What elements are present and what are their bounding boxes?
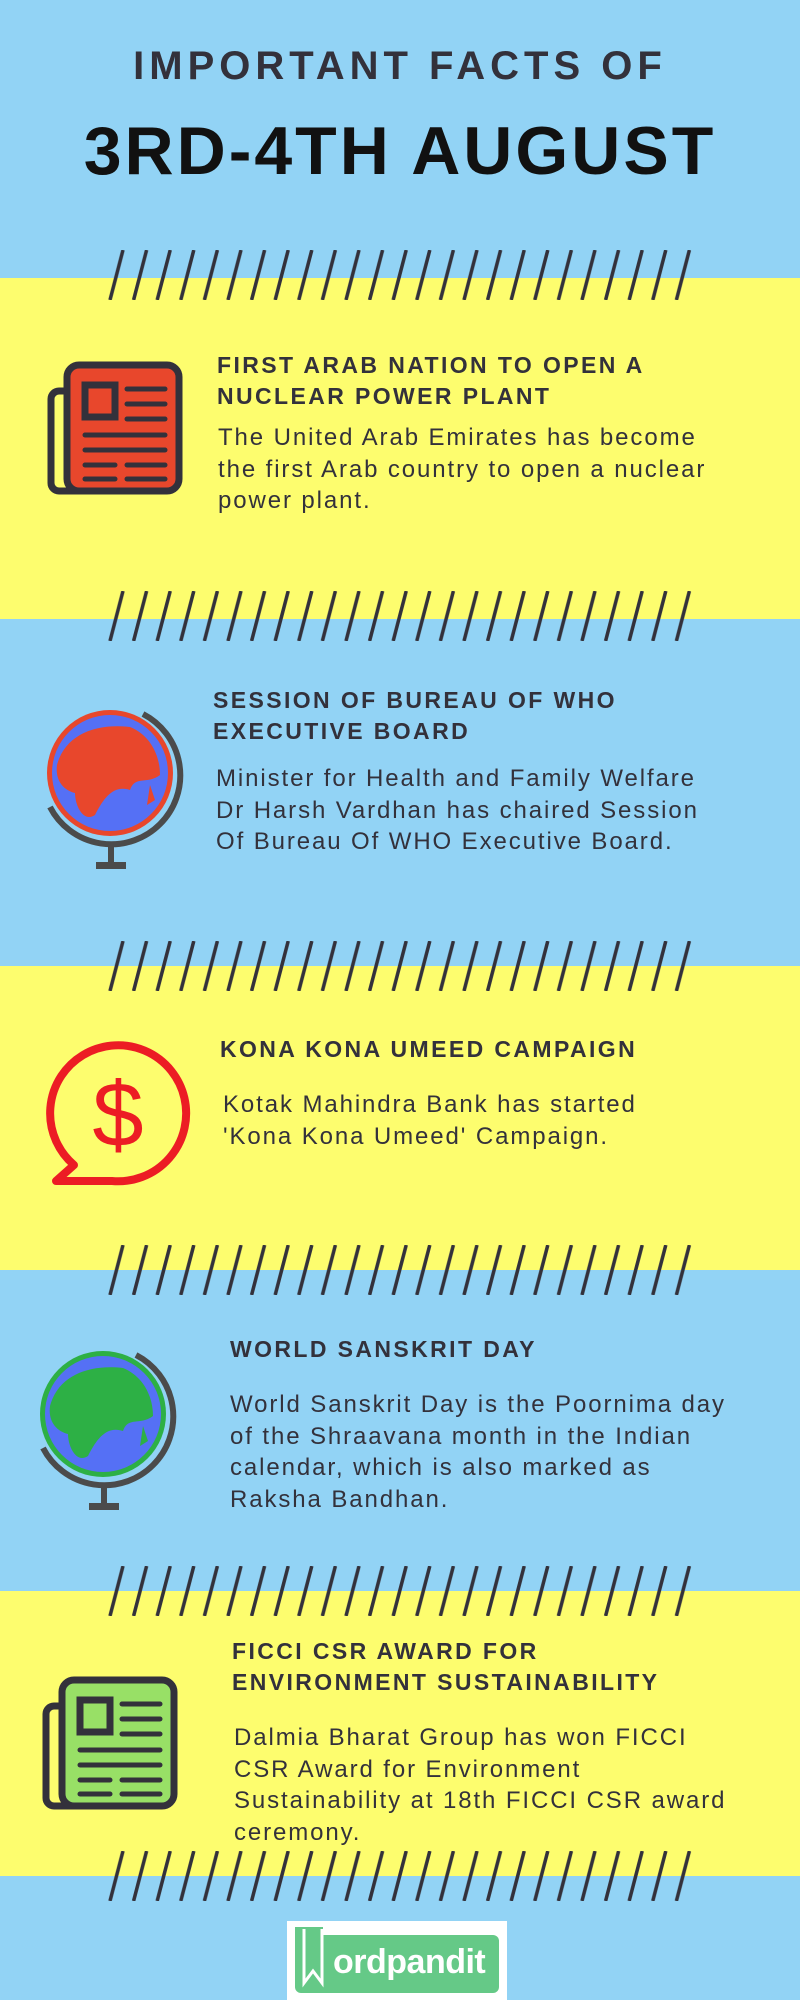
body text [223, 1091, 637, 1150]
icon: green newspaper [42, 1676, 178, 1810]
band: yellow 3 [0, 966, 800, 1270]
panel: fact 2 [47, 687, 699, 869]
icon: red newspaper [48, 362, 182, 494]
body text [216, 765, 699, 855]
body text: Raksha Bandhan. [230, 1486, 449, 1512]
band: yellow 1 [0, 278, 800, 619]
body text: power plant. [218, 487, 372, 514]
title line 2: 3RD-4TH AUGUST [84, 113, 716, 189]
body text: World Sanskrit Day is the Poornima day [230, 1391, 726, 1418]
heading: FICCI CSR AWARD FOR [232, 1638, 539, 1664]
band: blue 2 [0, 619, 800, 966]
body text: ceremony. [234, 1818, 361, 1846]
body text: Sustainability at 18th FICCI CSR award [234, 1787, 726, 1814]
heading [232, 1638, 659, 1695]
body text [230, 1391, 726, 1512]
title line 1: IMPORTANT FACTS OF [133, 44, 667, 88]
body text: Dr Harsh Vardhan has chaired Session [216, 796, 699, 824]
band: yellow 5 [0, 1591, 800, 1876]
body text: calendar, which is also marked as [230, 1454, 652, 1481]
heading: KONA KONA UMEED CAMPAIGN [220, 1036, 637, 1062]
body text: Dalmia Bharat Group has won FICCI [234, 1724, 688, 1751]
panel: fact 5 [42, 1638, 726, 1846]
heading: FIRST ARAB NATION TO OPEN A [217, 352, 645, 378]
body text: Of Bureau Of WHO Executive Board. [216, 828, 674, 855]
body text: Minister for Health and Family Welfare [216, 765, 696, 792]
heading: ENVIRONMENT SUSTAINABILITY [232, 1669, 659, 1695]
body text: 'Kona Kona Umeed' Campaign. [223, 1122, 609, 1150]
icon: green globe [40, 1351, 176, 1510]
body text: CSR Award for Environment [234, 1756, 581, 1782]
panel: fact 4 [40, 1336, 726, 1512]
heading [217, 352, 645, 409]
heading: SESSION OF BUREAU OF WHO [213, 687, 617, 713]
logo: wordpandit: ordpandit [333, 1943, 485, 1981]
icon: dollar speech bubble [46, 1041, 190, 1186]
logo: wordpandit [287, 1921, 507, 2000]
body text: of the Shraavana month in the Indian [230, 1422, 692, 1450]
heading: EXECUTIVE BOARD [213, 718, 470, 744]
icon: dollar speech bubble: $ [92, 1064, 144, 1166]
heading: NUCLEAR POWER PLANT [217, 383, 551, 409]
panel: fact 1 [48, 352, 706, 514]
icon: red globe [47, 710, 184, 869]
band: blue 4 [0, 1270, 800, 1591]
heading: WORLD SANSKRIT DAY [230, 1336, 537, 1362]
body text [218, 424, 706, 514]
body text: Kotak Mahindra Bank has started [223, 1091, 637, 1118]
body text: the first Arab country to open a nuclear [218, 456, 706, 482]
body text: The United Arab Emirates has become [218, 424, 697, 451]
heading [213, 687, 617, 744]
body text [234, 1724, 726, 1846]
panel: fact 3 [46, 1036, 637, 1186]
